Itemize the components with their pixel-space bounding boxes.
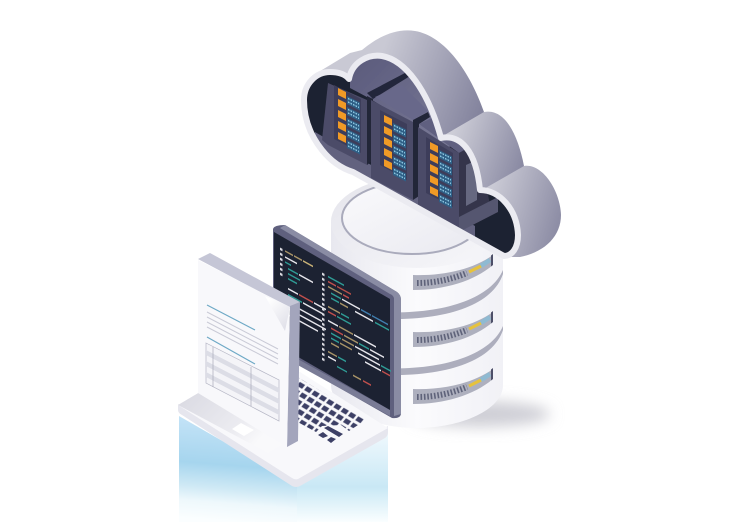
laptop — [178, 225, 401, 522]
cylinder body — [331, 176, 503, 428]
server vent 2 — [413, 311, 493, 347]
blue glow right face — [297, 432, 388, 522]
heading line 1 — [207, 305, 255, 330]
rack 1 — [322, 73, 410, 165]
heading line 2 — [207, 337, 255, 364]
illustration: cloud database and laptop — [178, 30, 561, 521]
code column 1 — [280, 247, 326, 336]
cylinder top face — [331, 176, 503, 268]
laptop base edge — [178, 404, 388, 487]
table — [206, 343, 279, 421]
palm rest shading — [178, 392, 290, 453]
interior dark — [307, 75, 515, 253]
rack base platform — [315, 132, 475, 236]
ground shadow — [410, 401, 550, 427]
screen right bevel — [280, 225, 401, 416]
rack 2 — [371, 85, 430, 200]
screen display — [274, 232, 390, 410]
blue glow left face — [179, 416, 297, 522]
space bar — [324, 426, 343, 437]
laptop deck — [178, 372, 388, 479]
cloud lobe middle body — [441, 112, 530, 200]
document — [198, 253, 300, 447]
trackpad — [232, 423, 254, 436]
document front page — [198, 260, 290, 447]
separator band 1 — [380, 270, 503, 319]
cloud interior — [307, 58, 515, 253]
screen lower bezel — [285, 352, 390, 416]
database cylinder — [331, 176, 503, 428]
cloud lobe top body — [312, 30, 490, 160]
laptop screen frame — [273, 225, 401, 418]
text lines — [207, 312, 278, 364]
server vent 1 — [413, 254, 493, 290]
keyboard — [294, 376, 367, 443]
rack 3 — [418, 112, 498, 232]
interior back wall — [350, 58, 450, 148]
cloud lobe bottom body — [482, 166, 561, 257]
document spine — [287, 302, 300, 447]
document back sheet — [198, 253, 300, 308]
cloud rim — [304, 56, 518, 256]
server vent 3 — [413, 368, 493, 404]
cloud — [295, 30, 561, 265]
code column 2 — [322, 272, 391, 398]
separator band 2 — [380, 326, 503, 375]
page fold — [265, 296, 290, 331]
top disk — [342, 182, 482, 254]
